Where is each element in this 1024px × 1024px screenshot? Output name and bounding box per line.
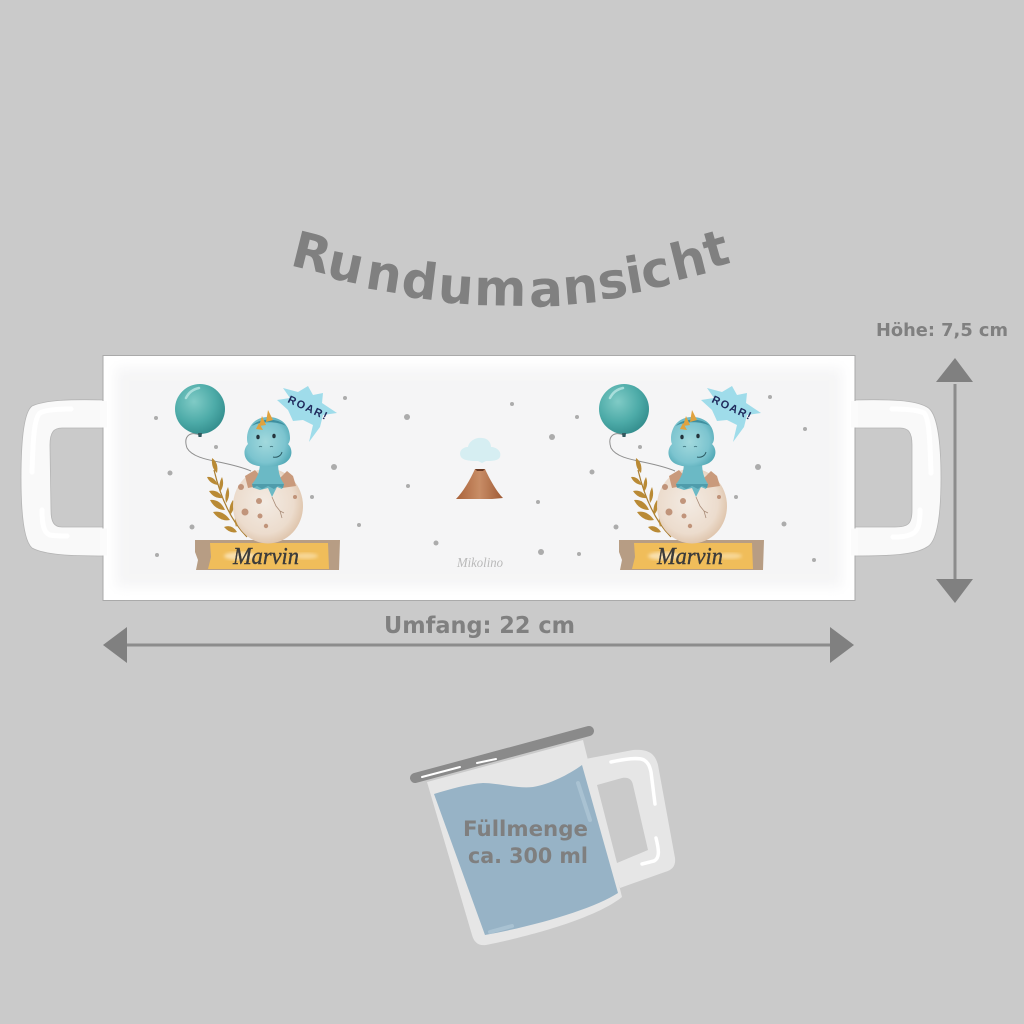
mug handle bbox=[580, 750, 675, 888]
left mug handle bbox=[21, 400, 106, 556]
fill label bbox=[463, 817, 588, 868]
scattered dots bbox=[154, 395, 816, 562]
label: height: Höhe: 7,5 cm bbox=[876, 320, 1008, 341]
arrow: height bbox=[936, 358, 973, 603]
mug body bbox=[427, 740, 622, 945]
rim highlights bbox=[422, 759, 496, 777]
icon: volcano with cloud bbox=[456, 438, 503, 499]
fill label: ca. 300 ml bbox=[468, 844, 588, 868]
right mug handle bbox=[852, 400, 941, 556]
tape banner bbox=[195, 540, 340, 570]
name text right: Marvin bbox=[656, 544, 723, 570]
title: Rundumansicht: Rundumansicht bbox=[286, 218, 735, 319]
arrow: circumference bbox=[103, 627, 854, 663]
ROAR text right: ROAR! bbox=[710, 394, 753, 422]
rim bbox=[415, 731, 589, 778]
dino neck and body bbox=[252, 462, 284, 497]
panel: mug wrap-around print bbox=[21, 356, 941, 600]
logo: Mikolino: Mikolino bbox=[456, 556, 503, 571]
fill label: Füllmenge bbox=[463, 817, 588, 841]
speech burst bbox=[277, 386, 337, 442]
balloon bbox=[175, 384, 251, 471]
water reflections bbox=[490, 783, 590, 932]
name text left: Marvin bbox=[232, 544, 299, 570]
leaf branch bbox=[207, 458, 247, 537]
icon: mug with fill level bbox=[415, 731, 675, 945]
handle highlights bbox=[611, 759, 658, 864]
illustration: dino in egg with balloon (left) bbox=[175, 384, 340, 570]
ROAR text left: ROAR! bbox=[286, 394, 329, 422]
illustration: dino in egg with balloon (right) bbox=[599, 384, 764, 570]
label: circumference: Umfang: 22 cm bbox=[384, 613, 575, 639]
dino head bbox=[244, 410, 291, 467]
cracked egg bbox=[233, 462, 303, 544]
water bbox=[434, 765, 618, 935]
